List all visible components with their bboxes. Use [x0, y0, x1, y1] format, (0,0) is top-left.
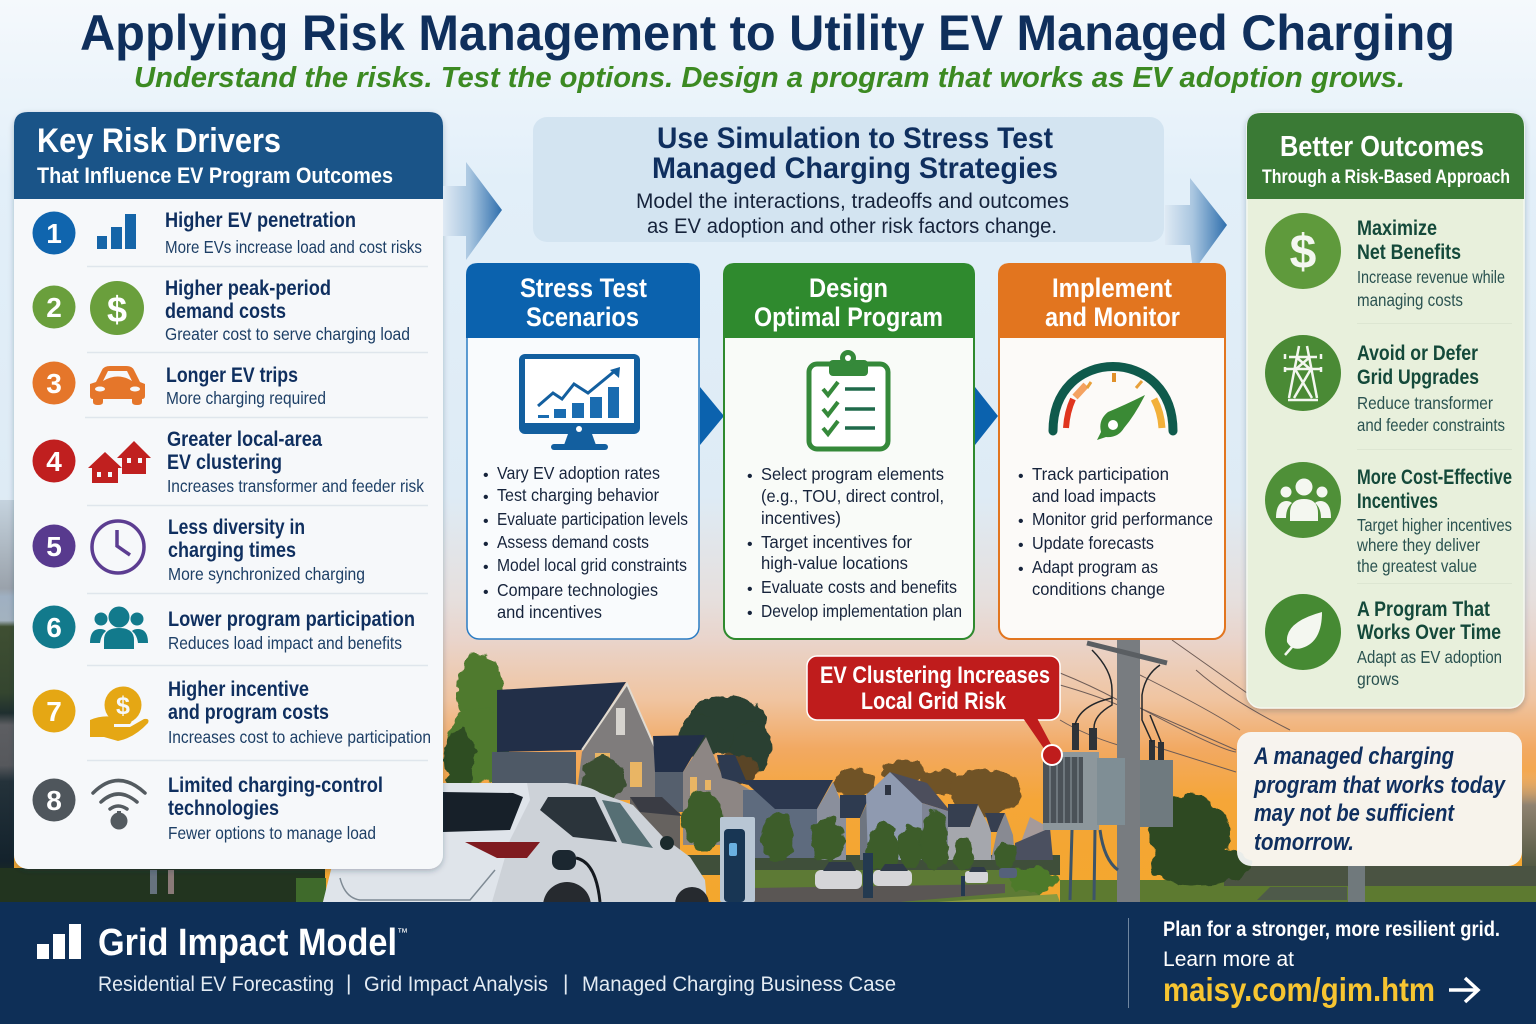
arrow: stress test to design: [700, 387, 724, 445]
risk 8: limited charging-control technologies: technologies: [168, 797, 279, 820]
outcome 4: a program that works over time: Works Over Time: [1357, 621, 1501, 644]
risk 2: peak-period demand costs: [32, 277, 410, 344]
risk 8: limited charging-control technologies: [32, 774, 383, 843]
bullets: implement: •: [1018, 468, 1024, 485]
risk 2: peak-period demand costs: Higher peak-period: [165, 277, 331, 300]
risk 7: incentive and program costs: $: [116, 692, 130, 720]
outcome 4: a program that works over time: grows: [1357, 669, 1399, 689]
outcome 3: more cost-effective incentives: where they deliver: [1356, 535, 1480, 555]
bullets: stress test: Model local grid constraints: [497, 555, 687, 575]
bullets: implement: Monitor grid performance: [1032, 509, 1213, 529]
risk 1: higher EV penetration: [32, 209, 422, 257]
bullets: stress test: •: [483, 536, 489, 553]
panel: implement and monitor: Implement: [1052, 273, 1172, 303]
bullets: implement: •: [1018, 561, 1024, 578]
bullets: stress test: •: [483, 559, 489, 576]
bullets: stress test: Vary EV adoption rates: [497, 463, 660, 483]
icon: clipboard checklist: [809, 350, 888, 449]
risk 2: peak-period demand costs: Greater cost to serve charging load: [165, 324, 410, 344]
callout: program sufficiency quote: tomorrow.: [1254, 829, 1354, 856]
risk 1: higher EV penetration: More EVs increase load and cost risks: [165, 237, 422, 257]
panel: better outcomes: Better Outcomes: [1280, 131, 1484, 163]
callout: EV clustering local grid risk: EV Clustering Increases: [820, 662, 1050, 689]
street trees: [581, 756, 1058, 893]
outcome 2: avoid or defer grid upgrades: Avoid or Defer: [1357, 342, 1478, 365]
footer call to action: maisy.com/gim.htm: [1163, 971, 1435, 1008]
risk 6: lower program participation: 6: [46, 612, 62, 643]
bullets: design: •: [747, 581, 753, 598]
power lines: [1060, 640, 1290, 772]
charging station: [720, 817, 755, 902]
outcome 1: maximize net benefits: Net Benefits: [1357, 241, 1461, 264]
bullets: implement: and load impacts: [1032, 486, 1156, 506]
outcome 2: avoid or defer grid upgrades: Reduce transformer: [1357, 393, 1493, 413]
outcome 3: more cost-effective incentives: Incentives: [1357, 490, 1438, 513]
bullets: implement: •: [1018, 537, 1024, 554]
bullets: stress test: Compare technologies: [497, 580, 658, 600]
risk 2: peak-period demand costs: 2: [46, 292, 62, 323]
bullets: stress test: Test charging behavior: [497, 485, 659, 505]
icon: footer logo bars: [37, 924, 81, 959]
row of houses: [743, 772, 1053, 860]
panel: stress test scenarios: Scenarios: [526, 302, 639, 332]
bullets: stress test: and incentives: [497, 602, 602, 622]
bullets: implement: [1018, 464, 1213, 599]
risk 4: local-area EV clustering: EV clustering: [167, 451, 282, 474]
outcome 2: avoid or defer grid upgrades: [1265, 335, 1505, 435]
risk 8: limited charging-control technologies: Fewer options to manage load: [168, 823, 376, 843]
panel: simulation banner: as EV adoption and other risk factors change.: [647, 215, 1057, 238]
arrow: simulation to outcomes: [1165, 178, 1227, 272]
bullets: implement: conditions change: [1032, 579, 1165, 599]
bullets: design: Evaluate costs and benefits: [761, 577, 957, 597]
risk 4: local-area EV clustering: 4: [46, 446, 62, 477]
bullets: stress test: Assess demand costs: [497, 532, 649, 552]
risk 7: incentive and program costs: Increases cost to achieve participation: [168, 727, 431, 747]
panel: simulation banner: Use Simulation to Stress Test: [657, 122, 1053, 155]
risk 3: longer EV trips: [32, 362, 326, 408]
risk 6: lower program participation: [32, 606, 415, 653]
bullets: design: [747, 464, 962, 622]
panel header: Key Risk Drivers: [37, 122, 281, 160]
house two: [630, 735, 750, 850]
bullets: design: •: [747, 536, 753, 553]
outcome 3: more cost-effective incentives: the greatest value: [1357, 556, 1477, 576]
footer call to action: Learn more at: [1163, 948, 1294, 971]
panel: design optimal program: Optimal Program: [754, 302, 943, 332]
risk 7: incentive and program costs: 7: [46, 696, 62, 727]
parked cars: [815, 862, 1017, 889]
outcome 2: avoid or defer grid upgrades: and feeder constraints: [1357, 415, 1505, 435]
bullets: design: (e.g., TOU, direct control,: [761, 486, 944, 506]
risk 5: less diversity in charging times: 5: [46, 531, 62, 562]
footer services: [98, 972, 896, 996]
risk 4: local-area EV clustering: [32, 428, 424, 496]
pole-mounted transformer: [1043, 650, 1173, 900]
outcome 4: a program that works over time: Adapt as EV adoption: [1357, 647, 1502, 667]
callout: EV clustering local grid risk: Local Grid Risk: [861, 688, 1007, 715]
risk 7: incentive and program costs: Higher incentive: [168, 678, 309, 701]
risk 8: limited charging-control technologies: Limited charging-control: [168, 774, 383, 797]
icon: gauge: [1053, 366, 1173, 440]
outcome 1: maximize net benefits: Maximize: [1357, 217, 1437, 240]
panel: simulation banner: Model the interactions, tradeoffs and outcomes: [636, 190, 1069, 213]
panel: better outcomes: [1247, 113, 1524, 708]
outcome 1: maximize net benefits: [1265, 213, 1505, 310]
risk 2: peak-period demand costs: $: [107, 289, 127, 330]
arrow: design to implement: [975, 387, 998, 445]
risk 4: local-area EV clustering: Increases transformer and feeder risk: [167, 476, 424, 496]
neighborhood lawn and road: [660, 855, 1060, 902]
house one: [492, 682, 664, 800]
bullets: implement: Track participation: [1032, 464, 1169, 484]
outcome 4: a program that works over time: [1265, 594, 1502, 689]
footer services: |: [563, 972, 568, 995]
footer call to action: [1163, 918, 1500, 1008]
outcome 2: avoid or defer grid upgrades: Grid Upgrades: [1357, 366, 1479, 389]
utility pole: [1087, 640, 1167, 902]
footer services: |: [346, 972, 351, 995]
bullets: implement: •: [1018, 513, 1024, 530]
panel: simulation banner: Managed Charging Strategies: [652, 152, 1058, 185]
outcome 1: maximize net benefits: managing costs: [1357, 290, 1463, 310]
right side trees and ground: [1060, 795, 1536, 902]
panel: simulation banner: [533, 117, 1164, 242]
risk 3: longer EV trips: Longer EV trips: [166, 364, 298, 387]
bullets: design: Select program elements: [761, 464, 944, 484]
footer services: Managed Charging Business Case: [582, 973, 896, 996]
bullets: stress test: [483, 463, 688, 622]
outcome 3: more cost-effective incentives: [1265, 462, 1512, 576]
icon: monitor with chart: [519, 354, 640, 450]
risk 7: incentive and program costs: [32, 678, 431, 747]
scene: suburban neighborhood at sunset: [0, 500, 1536, 930]
bullets: design: incentives): [761, 508, 841, 528]
bullets: stress test: Evaluate participation levels: [497, 509, 688, 529]
footer services: Grid Impact Analysis: [364, 973, 548, 996]
risk 1: higher EV penetration: 1: [46, 218, 62, 249]
bullets: implement: Update forecasts: [1032, 533, 1154, 553]
risk 5: less diversity in charging times: charging times: [168, 539, 296, 562]
bullets: design: high-value locations: [761, 553, 908, 573]
panel: implement and monitor: [998, 263, 1226, 639]
risk 6: lower program participation: Lower program participation: [168, 608, 415, 631]
footer services: Residential EV Forecasting: [98, 973, 334, 996]
risk 2: peak-period demand costs: demand costs: [165, 300, 286, 323]
footer: [0, 902, 1536, 1024]
risk 3: longer EV trips: 3: [46, 368, 62, 399]
callout: program sufficiency quote: A managed charging: [1253, 743, 1454, 770]
outcome 4: a program that works over time: A Program That: [1357, 598, 1490, 621]
arrow: drivers to simulation: [443, 162, 502, 260]
bullets: design: •: [747, 468, 753, 485]
risk 5: less diversity in charging times: More synchronized charging: [168, 564, 365, 584]
risk 7: incentive and program costs: and program costs: [168, 701, 329, 724]
risk 3: longer EV trips: More charging required: [166, 388, 326, 408]
outcome 1: maximize net benefits: Increase revenue while: [1357, 267, 1505, 287]
bullets: stress test: •: [483, 467, 489, 484]
electric SUV charging: [323, 783, 709, 930]
outcome 1: maximize net benefits: $: [1290, 226, 1317, 279]
callout: EV clustering local grid risk: [807, 656, 1062, 765]
panel: implement and monitor: and Monitor: [1045, 302, 1180, 332]
panel: key risk drivers: [14, 112, 443, 869]
bullets: design: •: [747, 605, 753, 622]
risk 8: limited charging-control technologies: 8: [46, 785, 62, 816]
bullets: design: Target incentives for: [761, 532, 912, 552]
panel header: That Influence EV Program Outcomes: [37, 163, 393, 188]
bullets: design: Develop implementation plan: [761, 601, 962, 621]
callout: program sufficiency quote: may not be sufficient: [1254, 800, 1455, 827]
background trees: [444, 654, 1021, 816]
risk 6: lower program participation: Reduces load impact and benefits: [168, 633, 402, 653]
panel: stress test scenarios: Stress Test: [520, 273, 647, 303]
street charging posts: [863, 853, 965, 898]
bullets: stress test: •: [483, 513, 489, 530]
subtitle: Understand the risks. Test the options. Design a program that works as EV adoption grows.: [134, 62, 1405, 94]
bullets: stress test: •: [483, 489, 489, 506]
risk 1: higher EV penetration: Higher EV penetration: [165, 209, 356, 232]
title: Applying Risk Management to Utility EV Managed Charging: [80, 5, 1455, 61]
bullets: implement: Adapt program as: [1032, 557, 1158, 577]
panel: design optimal program: [723, 263, 975, 639]
panel: design optimal program: Design: [809, 273, 888, 303]
risk 5: less diversity in charging times: Less diversity in: [168, 516, 305, 539]
risk 5: less diversity in charging times: [32, 516, 365, 584]
risk 4: local-area EV clustering: Greater local-area: [167, 428, 322, 451]
panel header: [14, 112, 443, 199]
panel: stress test scenarios: [466, 263, 700, 639]
footer brand: Grid Impact Model: [98, 922, 397, 964]
callout: program sufficiency quote: [1237, 732, 1522, 866]
footer brand: ™: [397, 927, 408, 939]
bullets: stress test: •: [483, 584, 489, 601]
